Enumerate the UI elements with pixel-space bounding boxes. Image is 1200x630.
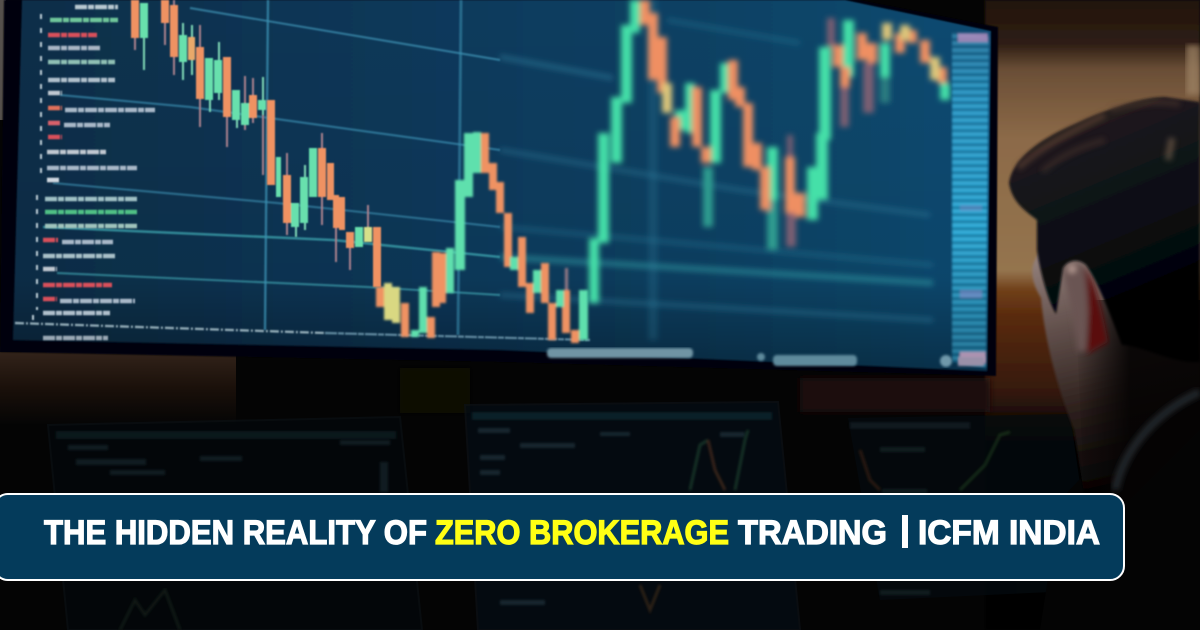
monitor frame	[0, 0, 998, 376]
main monitor	[0, 0, 998, 376]
candlesticks middle	[376, 132, 588, 343]
side data list	[15, 7, 590, 340]
footer status labels	[547, 348, 984, 367]
person viewing screens	[1009, 97, 1200, 630]
lower left monitor	[48, 417, 422, 630]
face and neck	[1032, 250, 1200, 500]
hair	[1009, 97, 1200, 362]
right data column	[952, 32, 989, 368]
candlesticks left (sharper)	[131, 0, 381, 287]
heading text: TRADING	[738, 514, 887, 552]
heading text: ZERO BROKERAGE	[435, 514, 729, 552]
monitor screen	[13, 0, 991, 371]
hair highlights	[1018, 102, 1180, 172]
title banner	[0, 494, 1124, 580]
heading text	[44, 514, 1100, 552]
ear	[1062, 262, 1108, 354]
banner box	[0, 494, 1124, 580]
lower right monitor	[848, 414, 1095, 600]
heading text: ICFM INDIA	[918, 514, 1100, 552]
jacket and collar	[1040, 385, 1200, 630]
lower centre monitor	[465, 402, 800, 630]
candlesticks right (blurred)	[589, 0, 950, 303]
heading text: THE HIDDEN REALITY OF	[44, 514, 427, 552]
chart grid lines	[43, 0, 500, 335]
